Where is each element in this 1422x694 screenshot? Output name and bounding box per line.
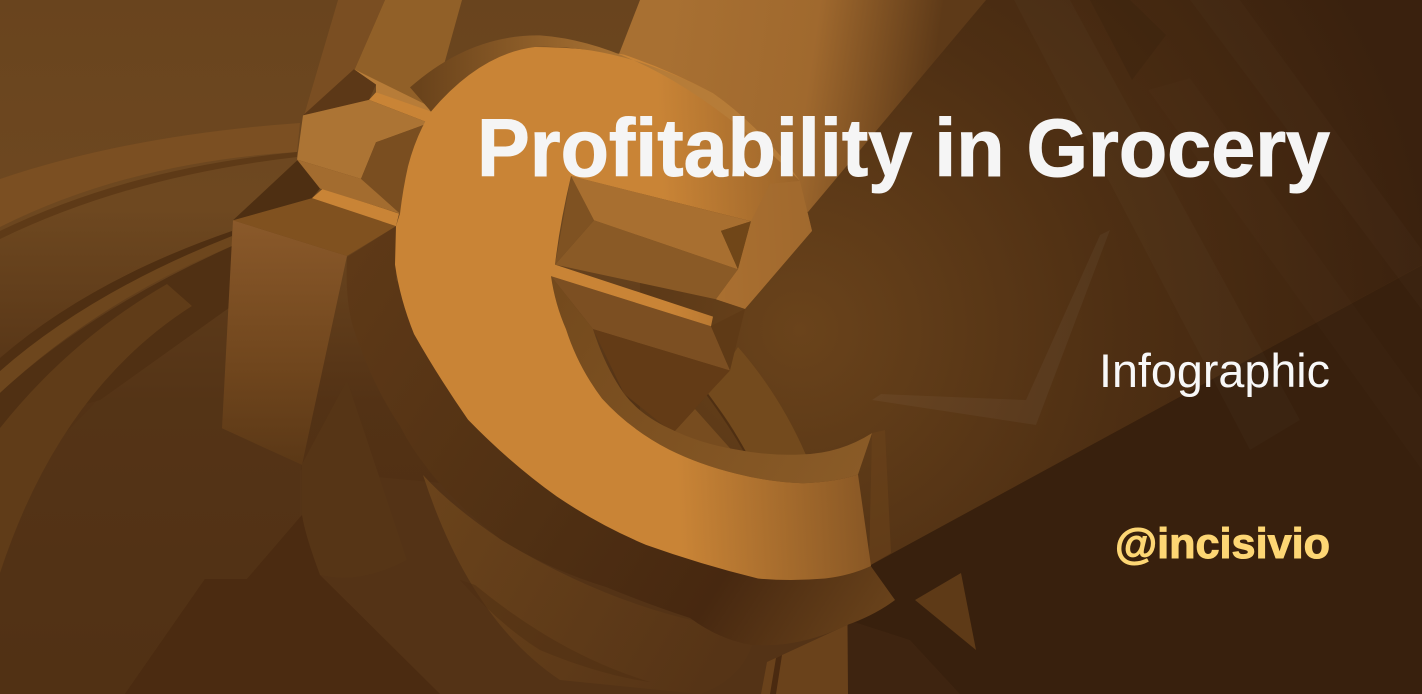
title: Profitability in Grocery bbox=[477, 103, 1330, 194]
euro symbol bbox=[222, 35, 872, 580]
triangle shard bbox=[915, 573, 976, 650]
counter background arc bbox=[673, 347, 806, 455]
bottom ray bbox=[761, 625, 848, 694]
subtitle: Infographic bbox=[1099, 344, 1330, 397]
left lower block bbox=[233, 160, 399, 256]
lower swirl bbox=[302, 380, 752, 694]
left ribbons bbox=[0, 123, 300, 573]
right arm overlay bbox=[716, 181, 812, 309]
left upper block bbox=[297, 69, 431, 214]
counter: lower arm bbox=[551, 276, 745, 433]
handle: @incisivio bbox=[1115, 520, 1330, 568]
left column bbox=[222, 220, 347, 465]
counter: upper arm bbox=[555, 176, 751, 299]
euro face bbox=[395, 47, 871, 580]
light rays behind the symbol bbox=[303, 0, 986, 212]
top glow arc bbox=[410, 35, 800, 181]
inner curved band bbox=[551, 276, 872, 483]
euro extrusion bbox=[347, 226, 895, 645]
